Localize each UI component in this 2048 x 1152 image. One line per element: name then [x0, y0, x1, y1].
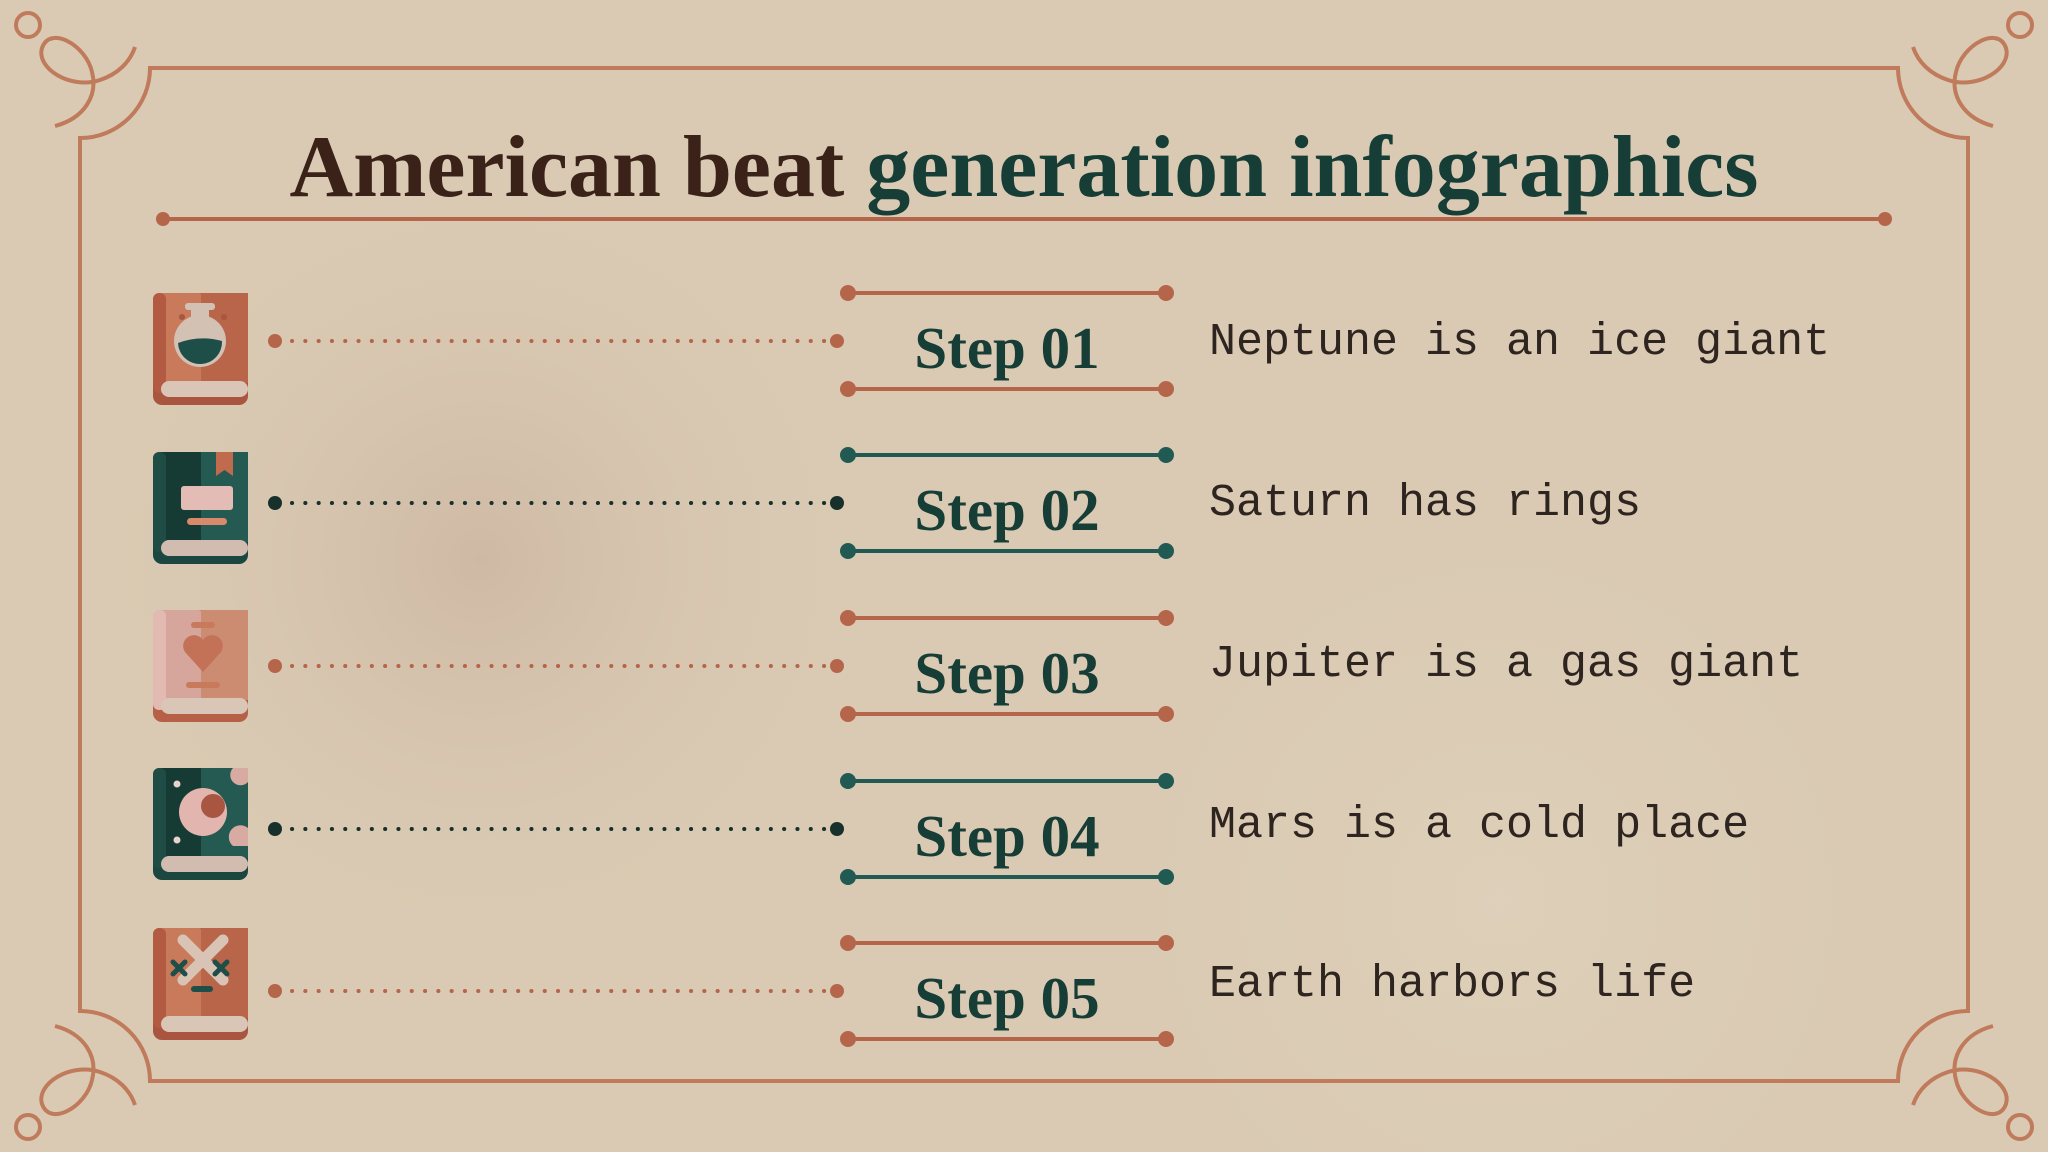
step 05 row [153, 928, 1695, 1047]
step label: Step 01 [914, 315, 1100, 381]
step 03 row [153, 610, 1803, 722]
step label [840, 610, 1174, 722]
description: Neptune is an ice giant [1209, 317, 1830, 368]
step 02 row [153, 447, 1641, 564]
dotted connector [268, 334, 844, 348]
dotted connector [268, 822, 844, 836]
step label: Step 02 [914, 477, 1100, 543]
step label [840, 773, 1174, 885]
description: Earth harbors life [1209, 959, 1695, 1010]
step label [840, 935, 1174, 1047]
description: Mars is a cold place [1209, 800, 1749, 851]
icon: book with flask [153, 293, 248, 405]
icon: teal book with moon [153, 768, 248, 880]
description: Saturn has rings [1209, 478, 1641, 529]
icon: teal book with bookmark [153, 452, 248, 564]
step 01 row [153, 285, 1830, 405]
step 04 row [153, 768, 1749, 885]
dotted connector [268, 984, 844, 998]
description: Jupiter is a gas giant [1209, 639, 1803, 690]
step label [840, 285, 1174, 397]
title underline [156, 212, 1892, 226]
dotted connector [268, 496, 844, 510]
step label: Step 05 [914, 965, 1100, 1031]
icon: book with crossed face [153, 928, 248, 1040]
step label: Step 03 [914, 640, 1100, 706]
icon: pink book with heart [153, 610, 248, 722]
dotted connector [268, 659, 844, 673]
title: American beat generation infographics [290, 119, 1758, 216]
step label: Step 04 [914, 803, 1100, 869]
step label [840, 447, 1174, 559]
